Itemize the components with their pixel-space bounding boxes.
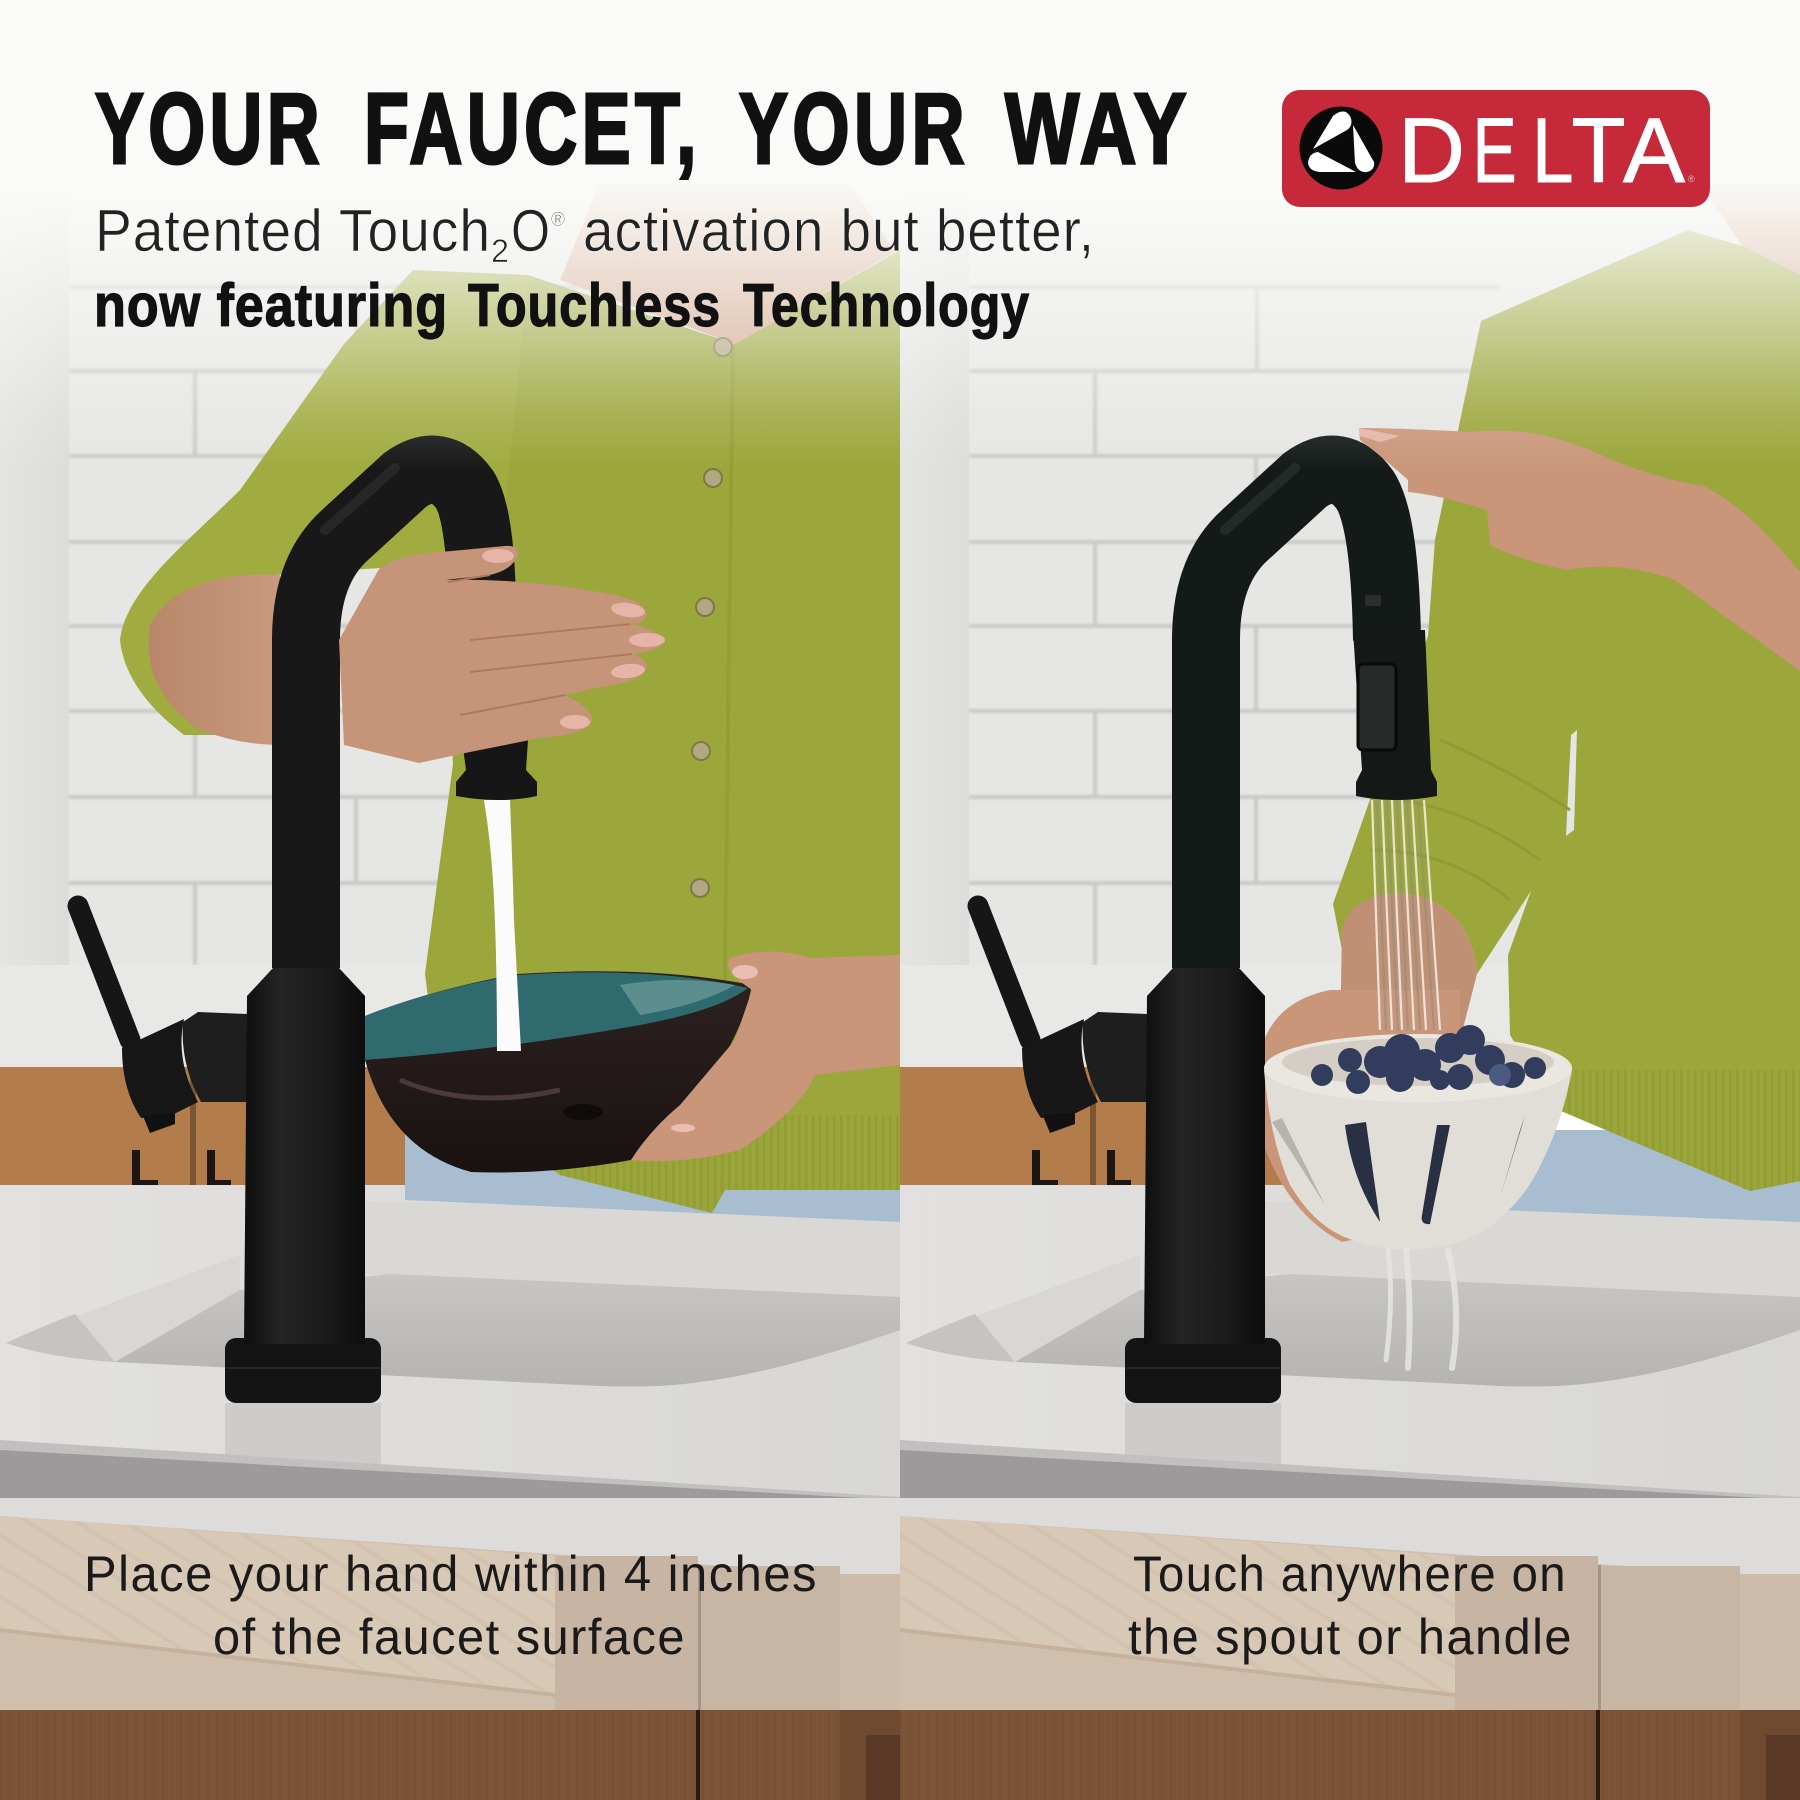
cardigan buttons: [691, 338, 732, 897]
spout left: [306, 470, 482, 968]
colander with blueberries: [1264, 1025, 1572, 1249]
water stream: [484, 800, 521, 1051]
room background left: [0, 237, 900, 1498]
neck: [560, 201, 895, 344]
Delta logo: D: [1398, 100, 1465, 202]
Delta logo: T: [1572, 100, 1626, 202]
neck right: [1712, 201, 1800, 275]
panel: right scene: [900, 196, 1800, 1800]
cardigan hem ribbing right: [1538, 1070, 1800, 1191]
cardigan torso left: [425, 250, 900, 1213]
jeans left: [405, 1134, 900, 1222]
subtitle line one: [95, 198, 1095, 269]
open hand near spout: [339, 546, 665, 763]
right caption: [1128, 1546, 1573, 1665]
spray streams: [1372, 800, 1440, 1030]
lower counter and cabinet right: [900, 1498, 1800, 1800]
Delta logo: L: [1532, 100, 1574, 202]
spout highlight right: [1225, 468, 1295, 530]
subtitle line one: activation but better,: [583, 198, 1095, 264]
spray head left: [456, 740, 537, 800]
forearm left: [149, 575, 280, 745]
right caption: Touch anywhere on: [1133, 1546, 1567, 1602]
subtitle line two: now featuring: [94, 272, 448, 339]
title: FAUCET,: [364, 73, 701, 185]
left caption: Place your hand within 4 inches: [84, 1546, 818, 1602]
subtitle line one: Patented Touch: [95, 198, 491, 264]
subtitle line one: 2: [491, 233, 509, 269]
hand under colander: [1264, 990, 1460, 1242]
pull-down spray head: [1353, 595, 1437, 800]
Delta logo: ®: [1688, 174, 1695, 184]
sleeve left: [120, 270, 528, 735]
title: [95, 73, 1191, 185]
lower counter and cabinet: [0, 1498, 900, 1800]
hand touching spout: [1359, 428, 1800, 671]
subtitle line one: O: [511, 198, 550, 264]
faucet base right: [978, 906, 1281, 1403]
Delta logo: E: [1473, 100, 1517, 202]
spout highlight left: [325, 468, 395, 530]
title: YOUR: [739, 73, 969, 185]
cardigan hem ribbing: [540, 1115, 900, 1213]
panel: left scene: [0, 196, 900, 1800]
spout right: [1206, 470, 1387, 968]
cardigan placket: [723, 458, 734, 960]
Delta logo: A: [1623, 100, 1686, 202]
subtitle line one: ®: [551, 209, 565, 231]
top white fade overlay: [0, 0, 1800, 470]
title: WAY: [1005, 73, 1191, 185]
right caption: the spout or handle: [1128, 1609, 1573, 1665]
faucet base left: [78, 906, 381, 1403]
title: YOUR: [95, 73, 324, 185]
subtitle line two: Technology: [743, 272, 1030, 339]
gap between sleeve and torso: [1566, 730, 1577, 836]
room background right: [900, 237, 1800, 1498]
dripping water: [1386, 1250, 1456, 1368]
jeans right: [1500, 1130, 1800, 1222]
Delta logo: [1282, 90, 1710, 207]
left caption: of the faucet surface: [213, 1609, 686, 1665]
hand holding bowl: [631, 952, 900, 1161]
forearm under colander: [1340, 893, 1477, 1040]
subtitle line two: [94, 272, 1030, 339]
left caption: [84, 1546, 818, 1665]
cardigan and sleeve right: [1333, 230, 1800, 1191]
ceramic bowl: [365, 971, 752, 1172]
subtitle line two: Touchless: [468, 272, 721, 339]
cuff ribs right: [1370, 740, 1570, 900]
